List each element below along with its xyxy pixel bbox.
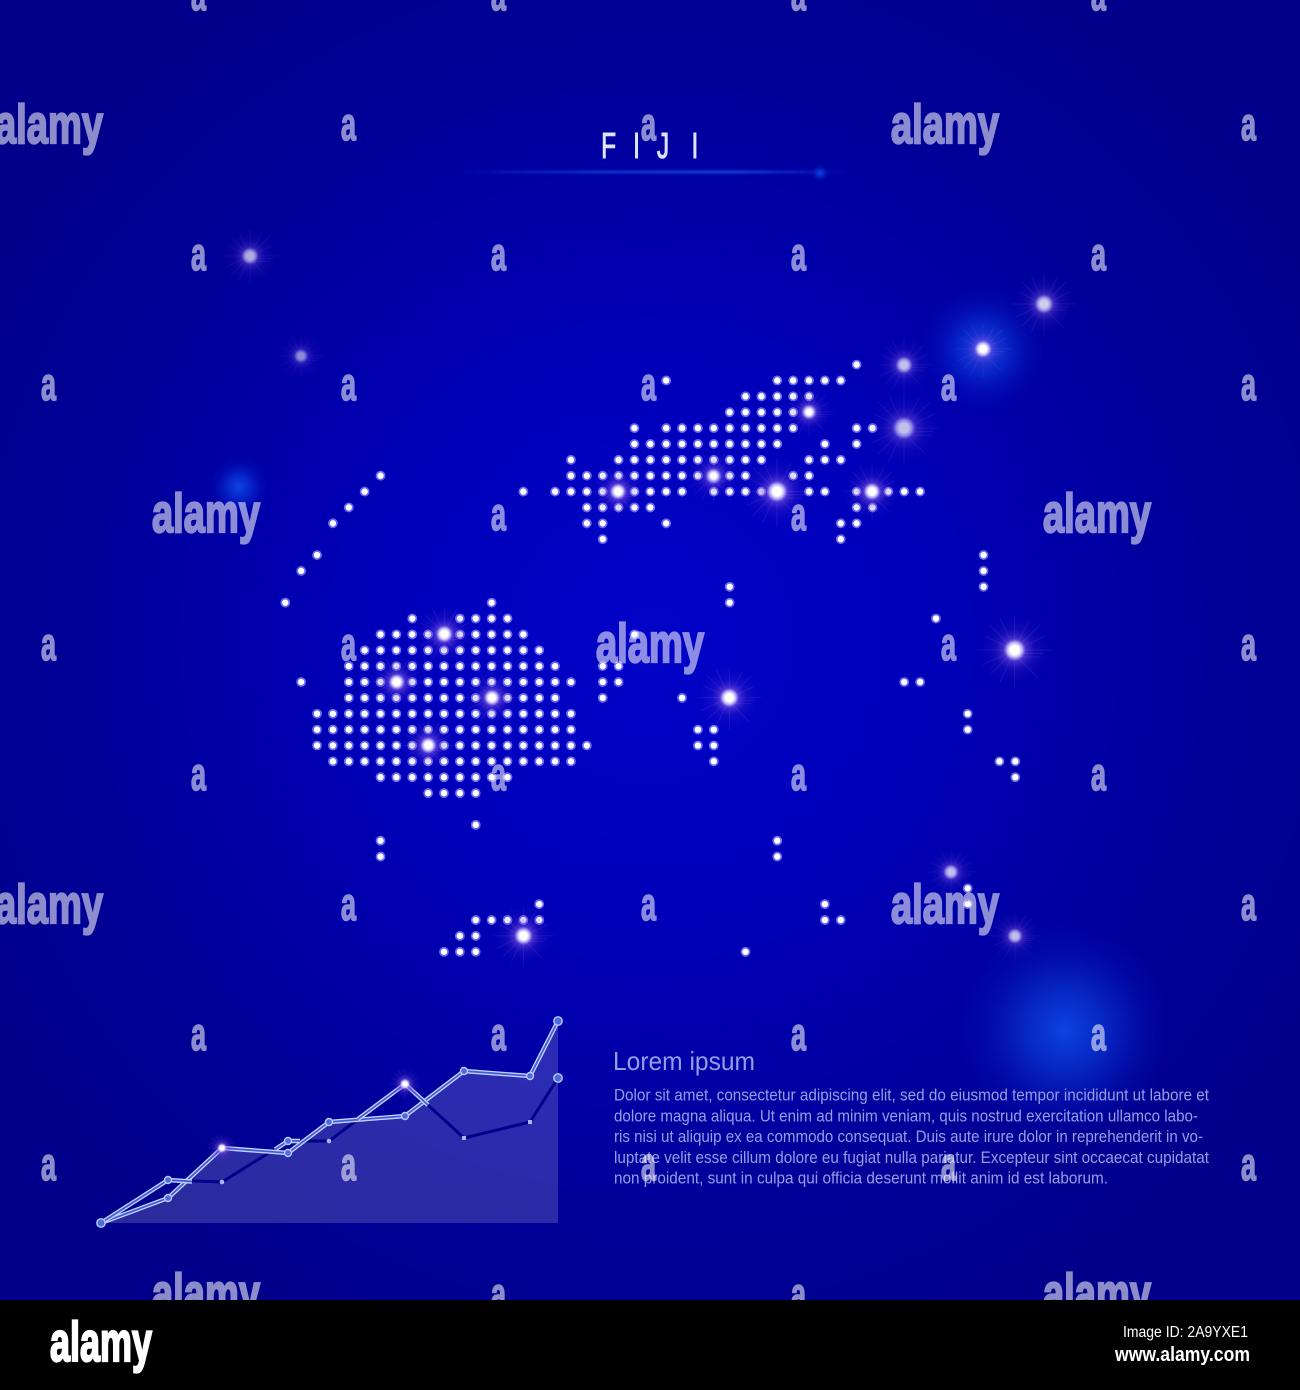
watermarks: a [41, 618, 56, 670]
watermarks: a [941, 358, 956, 410]
watermarks: a [191, 748, 206, 800]
text block heading: Lorem ipsum [613, 1046, 755, 1076]
text block body: ris nisi ut aliquip ex ea commodo consequat. Duis aute irure dolor in reprehenderit in vo- [614, 1128, 1203, 1146]
chart markers [97, 1017, 562, 1227]
watermarks: a [491, 1268, 506, 1320]
chart area fill [101, 1021, 558, 1223]
watermarks: a [1241, 98, 1256, 150]
watermarks: a [191, 1008, 206, 1060]
watermarks: a [1091, 748, 1106, 800]
title underline [450, 164, 850, 182]
glowing city lights [221, 229, 1076, 966]
text block body: Dolor sit amet, consectetur adipiscing elit, sed do eiusmod tempor incididunt ut labore et [614, 1086, 1209, 1104]
watermarks: a [791, 1008, 806, 1060]
watermarks: a [641, 1138, 656, 1190]
watermarks: a [1091, 228, 1106, 280]
watermarks: a [641, 878, 656, 930]
watermarks: a [491, 1008, 506, 1060]
text block body: dolore magna aliqua. Ut enim ad minim veniam, quis nostrud exercitation ullamco labo- [614, 1107, 1198, 1125]
dark series line [101, 1078, 558, 1223]
footer image id: Image ID: 2A9YXE1 [1123, 1324, 1248, 1341]
watermarks: a [341, 1138, 356, 1190]
watermarks: alamy [596, 612, 704, 674]
line chart [97, 1017, 562, 1227]
watermarks: alamy [891, 93, 999, 155]
watermarks: a [1241, 358, 1256, 410]
watermarks: a [41, 358, 56, 410]
blue glow: upper right [921, 287, 1045, 411]
watermarks: alamy [1043, 482, 1151, 544]
watermarks: a [341, 98, 356, 150]
text block body [614, 1086, 1209, 1187]
chart peak sparkles [206, 1068, 423, 1164]
watermarks: a [191, 228, 206, 280]
watermarks: a [791, 748, 806, 800]
watermarks: a [41, 1138, 56, 1190]
watermarks: a [491, 748, 506, 800]
watermarks: a [1091, 1008, 1106, 1060]
watermarks: alamy [152, 482, 260, 544]
blue glow: left [209, 457, 269, 517]
dot map of Fiji [285, 365, 1017, 952]
watermarks: a [491, 228, 506, 280]
second series highlighted segments [101, 1084, 428, 1223]
bright series line [101, 1021, 558, 1223]
watermarks: a [791, 1268, 806, 1320]
watermarks: alamy [1043, 1262, 1151, 1324]
watermarks: a [1241, 878, 1256, 930]
watermarks: a [491, 488, 506, 540]
watermarks: a [1241, 618, 1256, 670]
dark series data points [220, 1120, 532, 1184]
watermarks: a [791, 228, 806, 280]
watermarks: a [341, 358, 356, 410]
watermarks: a [641, 358, 656, 410]
watermarks: a [341, 618, 356, 670]
watermarks: a [341, 878, 356, 930]
footer url: www.alamy.com [1114, 1344, 1250, 1366]
watermarks: a [1241, 1138, 1256, 1190]
text block body: luptate velit esse cillum dolore eu fugiat nulla pariatur. Excepteur sint occaecat cupidatat [614, 1149, 1209, 1167]
watermarks: a [641, 98, 656, 150]
watermarks: a [941, 1138, 956, 1190]
watermarks: alamy [152, 1262, 260, 1324]
title: FIJI [601, 125, 698, 166]
blue glow: lower right [957, 922, 1173, 1138]
text block body: non proident, sunt in culpa qui officia deserunt mollit anim id est laborum. [614, 1169, 1108, 1187]
watermarks: a [791, 488, 806, 540]
watermarks: alamy [891, 873, 999, 935]
footer logo: alamy [50, 1310, 152, 1373]
footer bar [0, 1300, 1300, 1390]
watermarks: a [941, 618, 956, 670]
